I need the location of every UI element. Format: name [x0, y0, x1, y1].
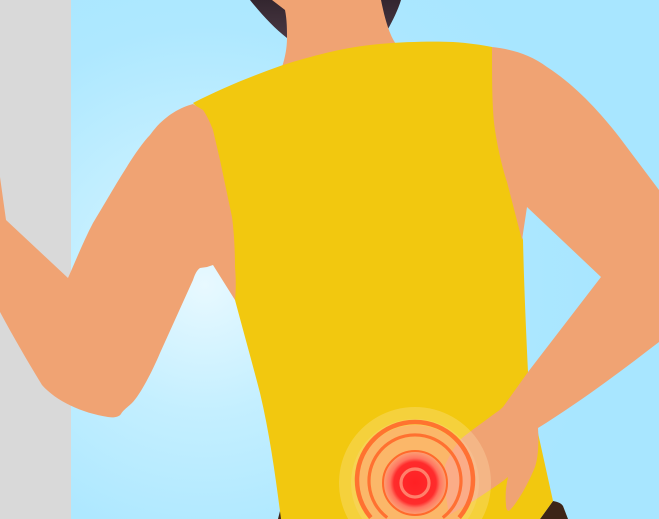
inner glow	[357, 425, 473, 519]
red pain disc	[383, 451, 447, 515]
neck	[272, 0, 396, 70]
middle glow	[351, 419, 479, 519]
outer glow	[339, 407, 491, 519]
pale ring	[401, 469, 429, 497]
left arm	[0, 104, 236, 417]
shirt	[193, 42, 553, 519]
hair	[250, 0, 401, 38]
orange ring inner	[383, 451, 447, 515]
trousers	[540, 501, 568, 519]
pain rings	[339, 407, 491, 519]
wall	[0, 0, 71, 519]
orange ring middle	[369, 435, 461, 518]
trousers left	[278, 511, 283, 519]
orange ring outer	[357, 422, 473, 518]
right arm and hand	[445, 47, 659, 515]
